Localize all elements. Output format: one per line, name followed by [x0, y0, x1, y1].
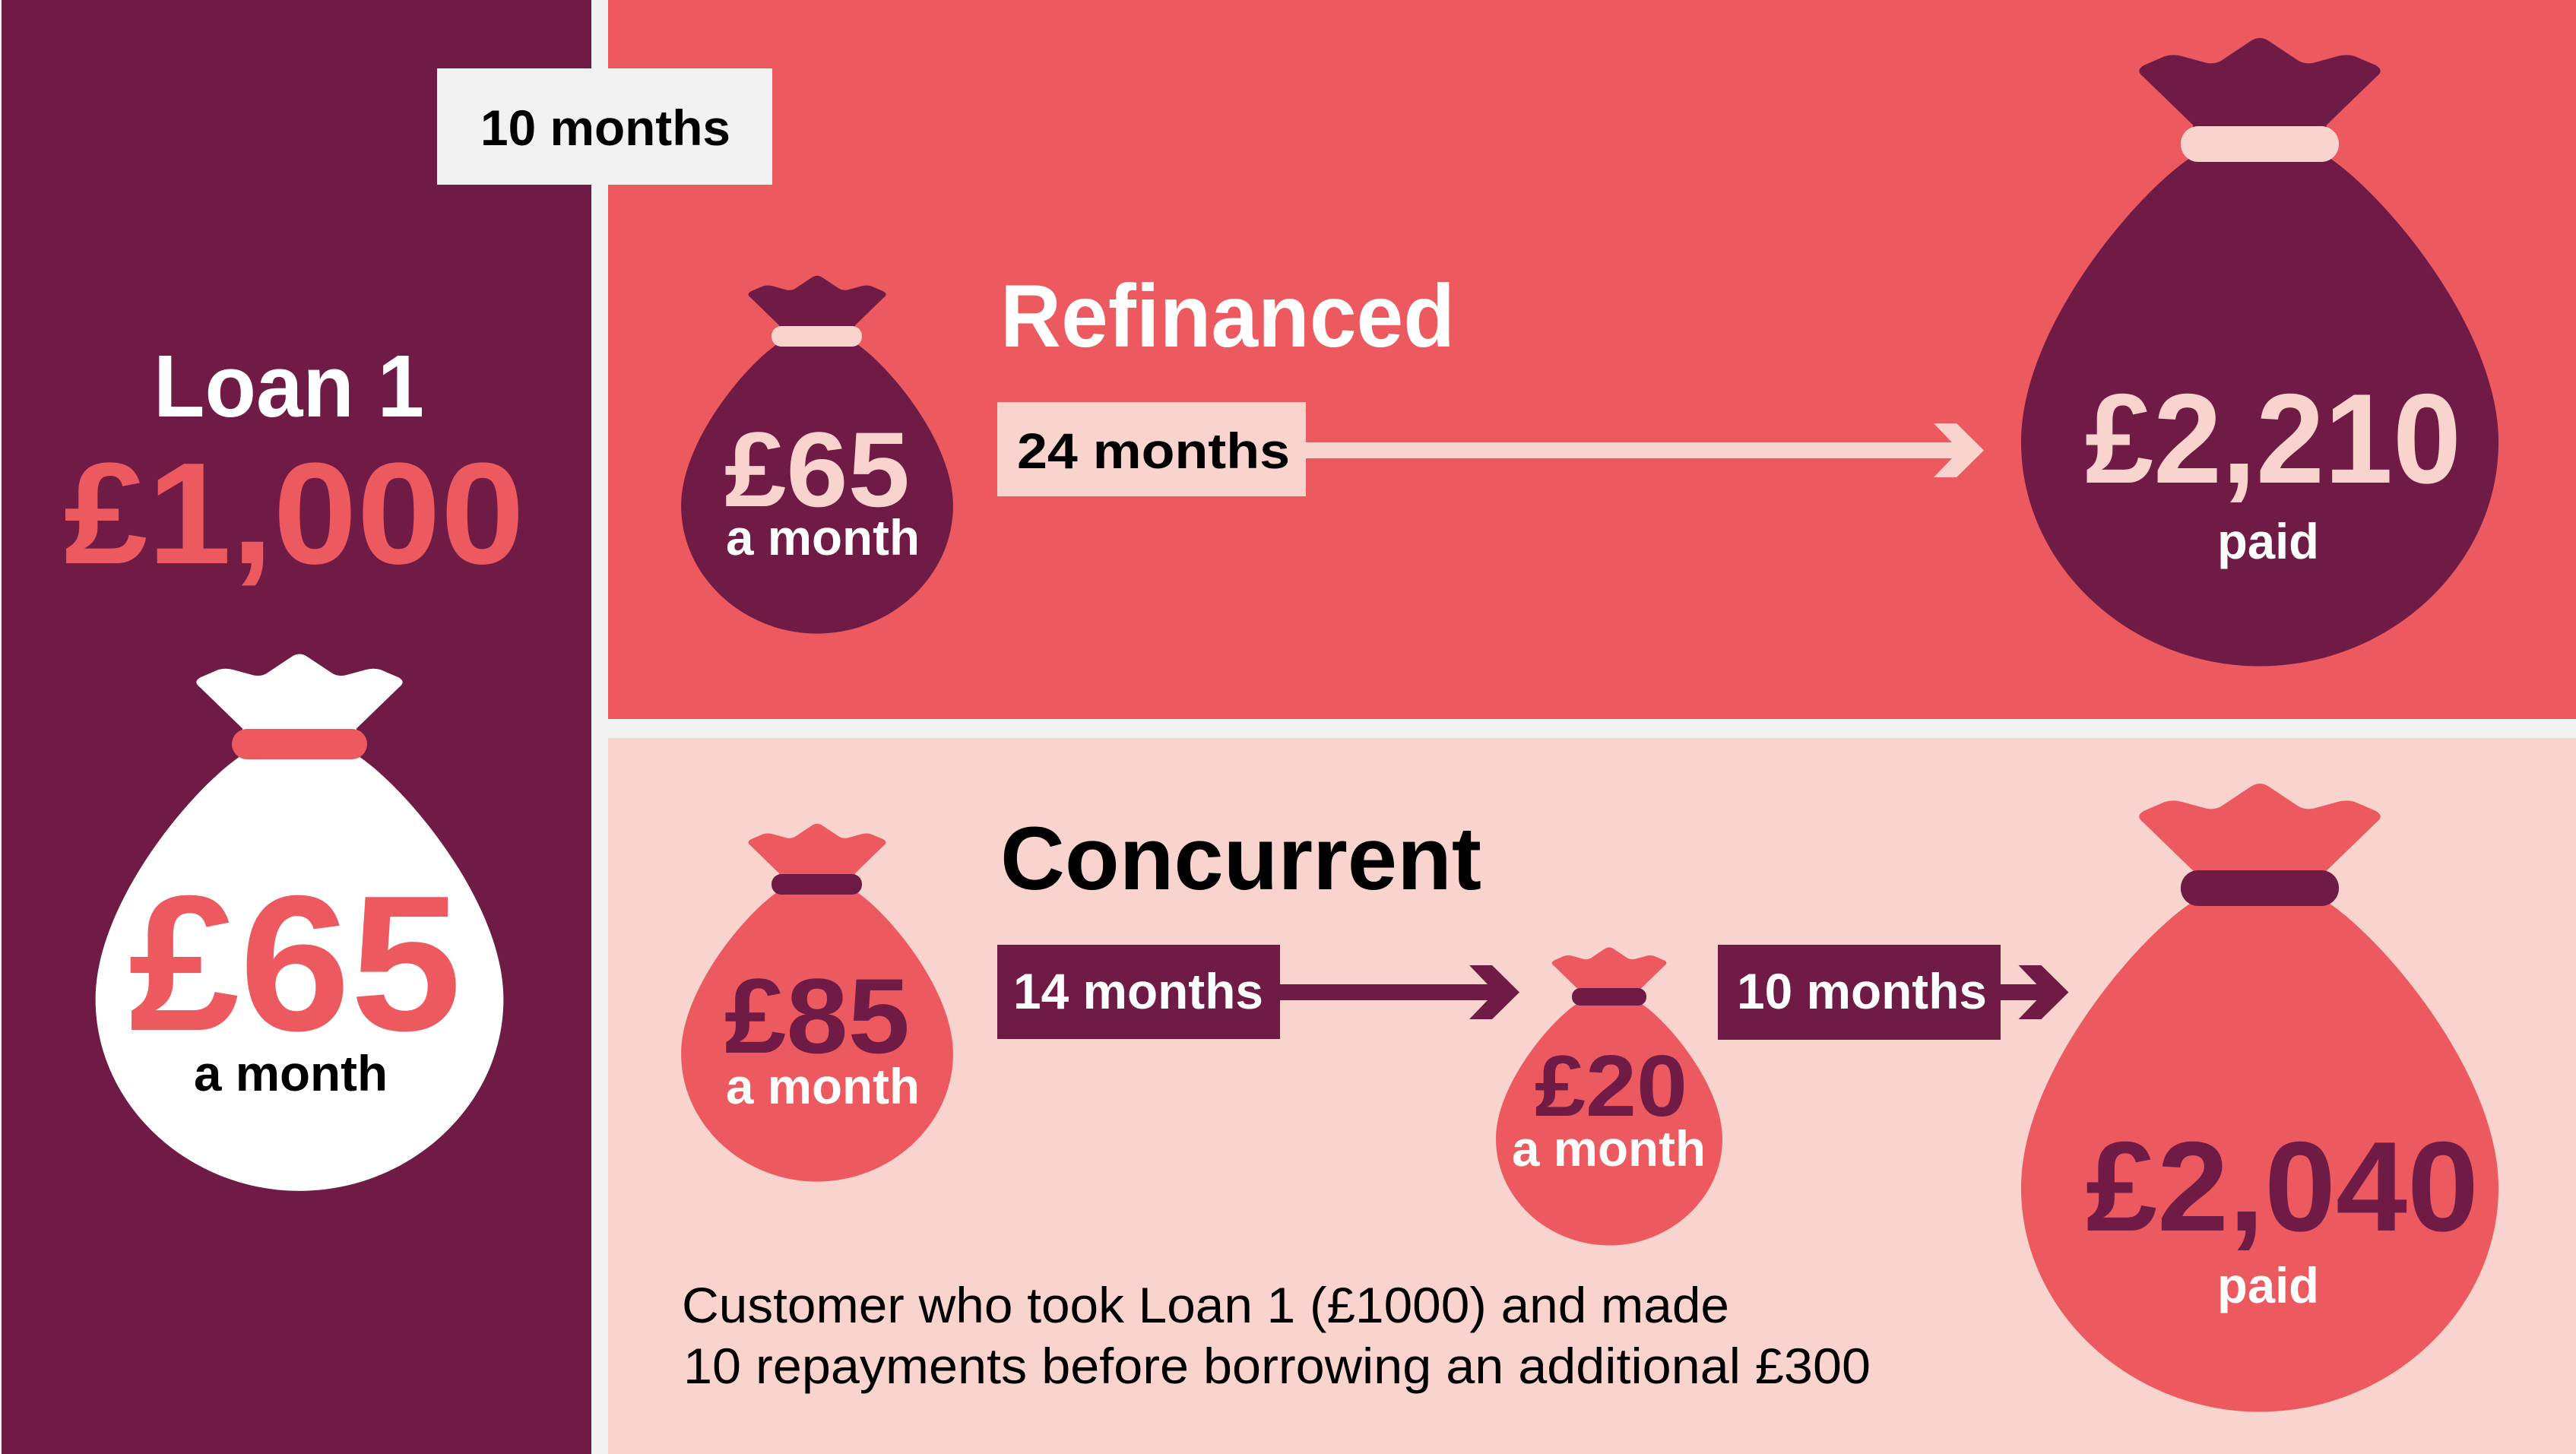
- text block: customer note: 10 repayments before borrowing an additional £300: [683, 1338, 1871, 1394]
- label: 10 months: [1718, 945, 2001, 1040]
- label: 10 months: 10 months: [1737, 963, 1987, 1019]
- label: 14 months: 14 months: [1013, 963, 1263, 1019]
- panel: concurrent: [608, 738, 2576, 1454]
- icon: £85 bag: [681, 824, 953, 1182]
- icon: total paid bag: £2,040: [2086, 1115, 2479, 1258]
- text block: customer note: Customer who took Loan 1 (£1000) and made: [682, 1277, 1729, 1333]
- panel: loan 1: [2, 0, 591, 1454]
- icon: monthly payment bag: a month: [726, 509, 920, 565]
- icon: total paid bag: paid: [2217, 1257, 2319, 1313]
- icon: total paid bag: £2,210: [2085, 367, 2461, 510]
- icon: total paid bag: paid: [2217, 513, 2319, 569]
- panel: refinanced: [608, 0, 2576, 719]
- icon: white money bag: [96, 654, 503, 1191]
- icon: £20 bag: [1496, 947, 1722, 1246]
- label: 24 months: [997, 402, 1306, 496]
- arrow: refinanced term: [1292, 423, 1984, 477]
- arrow: second term: [1991, 965, 2069, 1019]
- icon: monthly payment bag: £65: [724, 410, 910, 529]
- icon: total paid bag: [2021, 784, 2498, 1412]
- arrow: first term: [1269, 965, 1519, 1019]
- icon: monthly payment bag: [681, 276, 953, 634]
- icon: £85 bag: £85: [724, 956, 910, 1075]
- icon: £85 bag: a month: [726, 1058, 920, 1114]
- icon: £20 bag: a month: [1512, 1120, 1706, 1177]
- label: 10 months on loan 1: [437, 68, 772, 185]
- loan amount: £1,000: [64, 433, 524, 594]
- label: 10 months on loan 1: 10 months: [480, 100, 730, 156]
- label: 24 months: 24 months: [1017, 423, 1290, 479]
- icon: white money bag: £65: [128, 855, 461, 1071]
- heading: Refinanced: Refinanced: [1000, 266, 1455, 366]
- text block: customer note: [682, 1277, 1871, 1394]
- heading: Loan 1: Loan 1: [154, 337, 424, 436]
- label: 14 months: [997, 945, 1280, 1039]
- heading: Concurrent: Concurrent: [1000, 809, 1481, 909]
- icon: white money bag: a month: [194, 1045, 388, 1101]
- icon: £20 bag: £20: [1535, 1038, 1687, 1135]
- icon: total paid bag: [2021, 38, 2498, 667]
